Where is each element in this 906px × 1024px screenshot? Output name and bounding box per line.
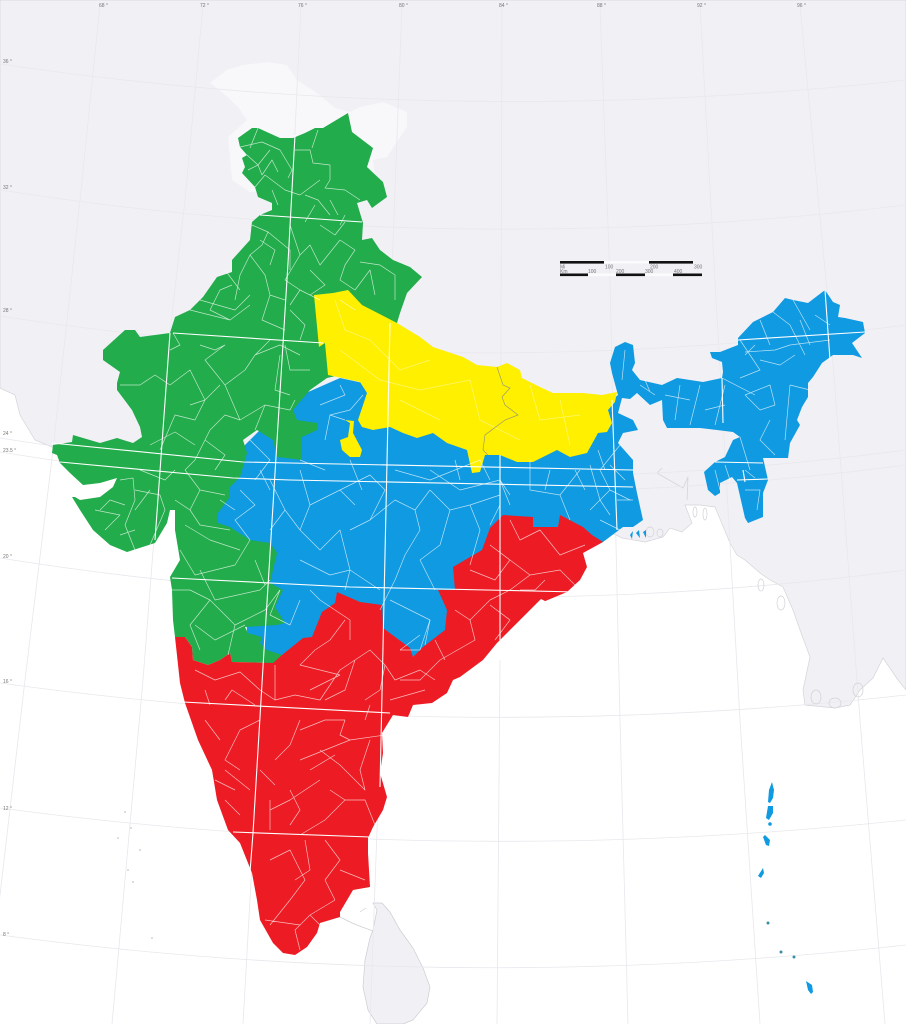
scale bar [560,261,703,276]
scale bar: 100 [605,264,614,270]
sundarbans islands [630,530,646,539]
coordinate labels: 28 ° [3,308,12,314]
coordinate labels: 68 ° [99,3,108,9]
coordinate labels: 8 ° [3,932,9,938]
delta coastline detail [646,507,863,708]
coordinate labels: 92 ° [697,3,706,9]
scale bar: 400 [674,269,683,275]
region: yellow north [314,290,617,473]
coordinate labels: 16 ° [3,679,12,685]
coordinate labels: 84 ° [499,3,508,9]
andaman and nicobar islands [758,782,813,994]
uttar pradesh district lines [335,300,580,445]
coordinate labels: 72 ° [200,3,209,9]
adam's bridge [340,908,373,931]
coordinate labels: 32 ° [3,185,12,191]
latitude and longitude lines over india [52,135,865,885]
coordinate labels: 76 ° [298,3,307,9]
state border line [483,367,518,455]
bangladesh river lines [657,468,688,500]
coordinate labels: 24 ° [3,431,12,437]
scale bar: 100 [588,269,597,275]
scale bar: 200 [616,269,625,275]
sri lanka [363,903,430,1024]
disputed northern territory [210,62,407,192]
lakshadweep islands [117,811,153,939]
region: red south and east [175,515,603,955]
scale bar: 200 [650,264,659,270]
district boundaries [95,128,830,950]
coordinate labels: 36 ° [3,59,12,65]
coordinate labels: 23.5 ° [3,448,16,454]
region: green north-west [52,113,422,665]
scale bar: Km [560,269,568,275]
scale bar: 300 [645,269,654,275]
coordinate labels: 20 ° [3,554,12,560]
coordinate labels: 88 ° [597,3,606,9]
chilika lake [533,599,545,609]
coordinate labels: 80 ° [399,3,408,9]
scale bar: Mi [560,264,565,270]
coordinate labels: 12 ° [3,806,12,812]
neighbouring land mass [0,0,906,708]
region: blue central and north-east [205,290,865,670]
region: yellow enclave [340,420,362,457]
coordinate labels: 96 ° [797,3,806,9]
scale bar: 300 [694,264,703,270]
